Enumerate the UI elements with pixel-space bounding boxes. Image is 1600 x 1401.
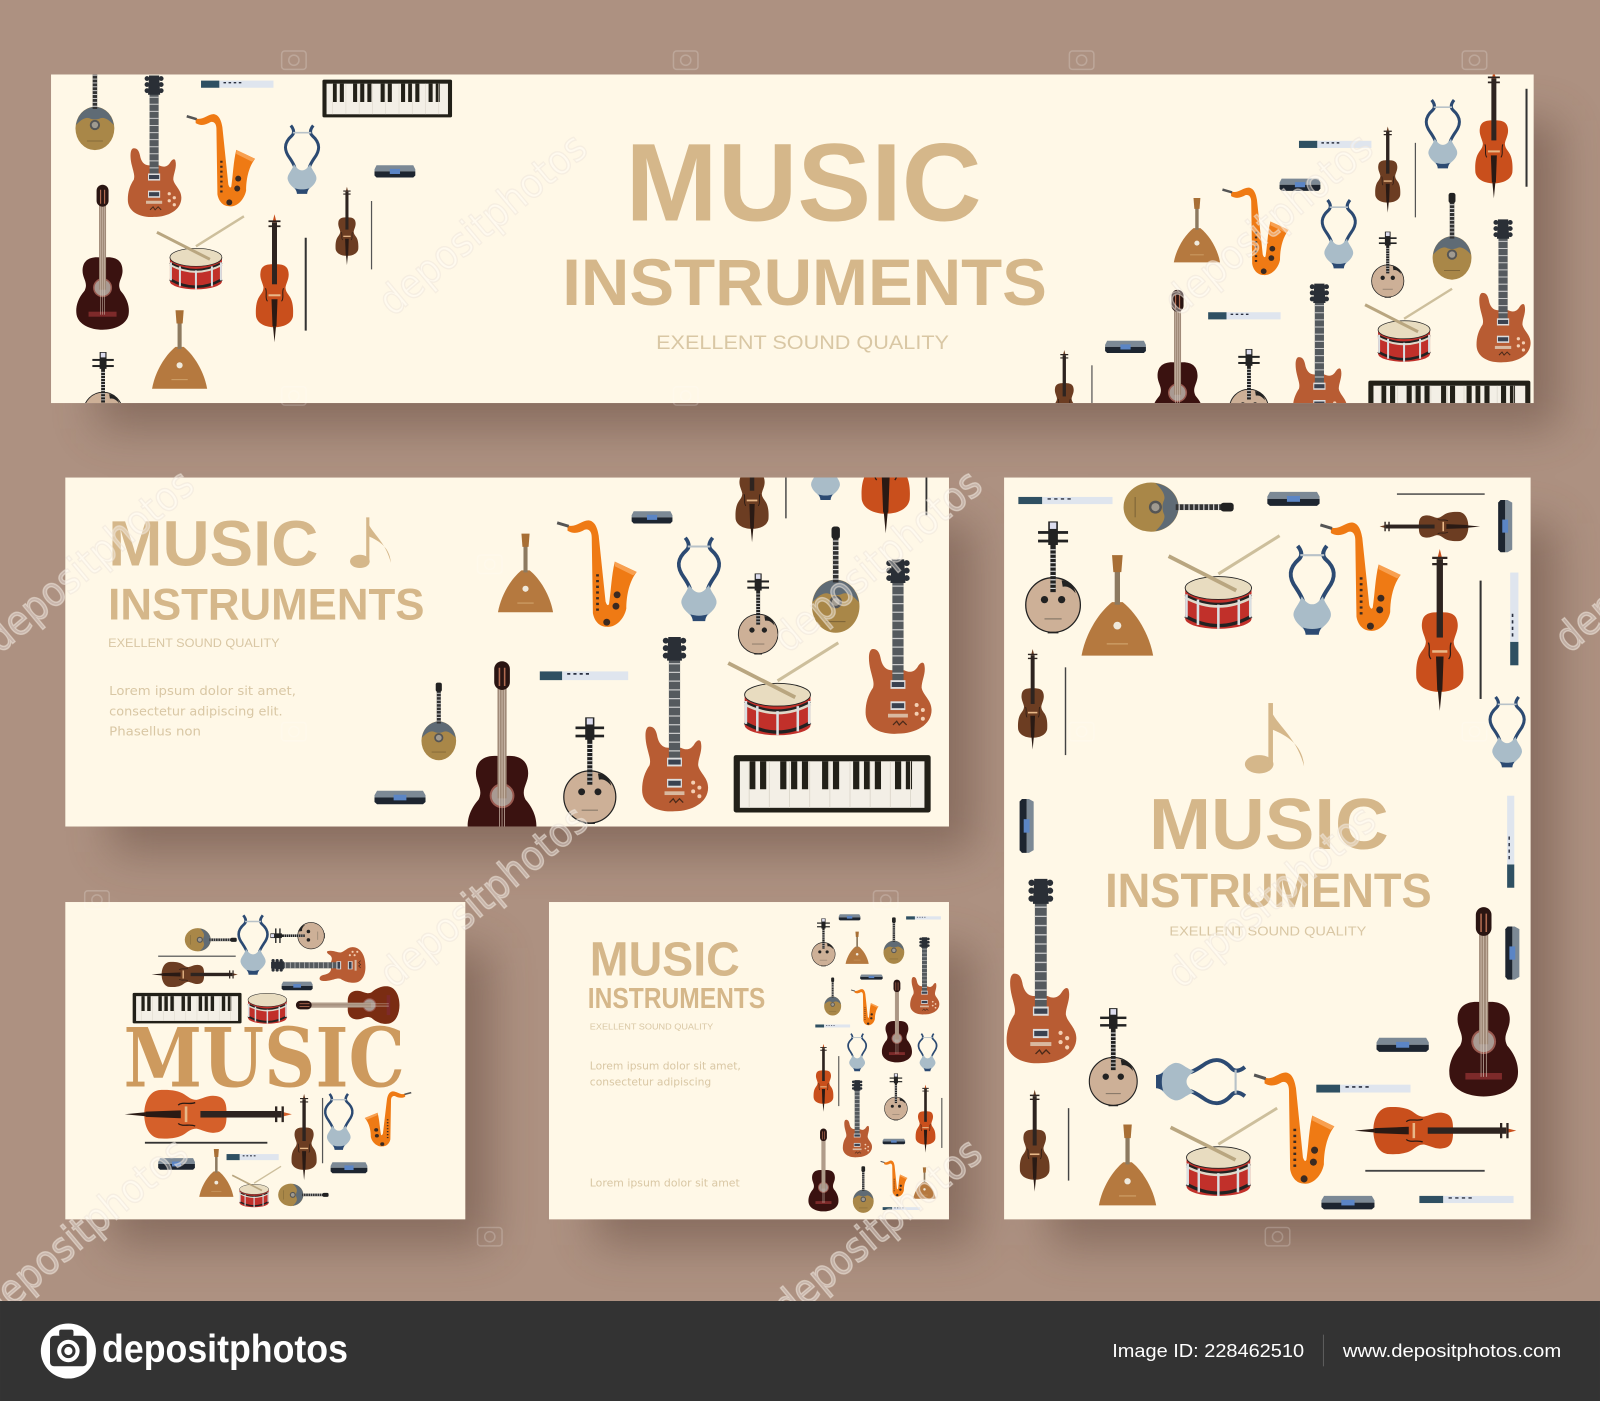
icon: violin [1054, 350, 1074, 403]
body text: Lorem ipsum dolor sit amet, [590, 1059, 741, 1072]
icon: saxophone [1222, 188, 1289, 275]
icon: violin [292, 1094, 317, 1180]
icon: electric guitar [271, 947, 365, 983]
icon: balalaika [152, 310, 207, 389]
icon: bow [926, 478, 927, 515]
icon: lyre [679, 538, 719, 621]
icon: balalaika [199, 1149, 233, 1197]
panel: tall poster [1004, 478, 1531, 1219]
icon: electric guitar [1007, 879, 1076, 1063]
icon: acoustic guitar [296, 986, 399, 1024]
icon: mandolin [185, 928, 237, 951]
icon: electric guitar [910, 937, 939, 1014]
icon: flute [1507, 796, 1514, 888]
icon: flute [1419, 1196, 1514, 1203]
icon: ruan [1230, 348, 1268, 403]
card instruments, clipped to the panel [374, 367, 932, 851]
icon: drum [232, 1166, 281, 1207]
icon: mandolin [824, 978, 841, 1016]
icon: mandolin [812, 527, 859, 633]
icon: mandolin [278, 1184, 329, 1206]
icon: harmonica [331, 1162, 367, 1173]
icon: bow [1365, 1170, 1485, 1172]
icon: ruan [1026, 521, 1080, 633]
icon: bow [838, 1056, 839, 1106]
icon: acoustic guitar [76, 185, 129, 330]
icon: bow [305, 238, 307, 331]
body text: consectetur adipiscing [590, 1076, 711, 1089]
icon: ruan [1089, 1008, 1137, 1106]
icon: keyboard [734, 755, 931, 812]
icon: balalaika [1099, 1124, 1156, 1205]
icon: ruan [564, 717, 616, 824]
icon: flute [1510, 573, 1518, 665]
icon: drum [248, 993, 287, 1024]
icon: bow [145, 1142, 267, 1144]
icon: mandolin [1124, 483, 1234, 532]
icon: bow [1525, 89, 1528, 187]
icon: music note [1245, 703, 1304, 773]
icon: cello [125, 1090, 292, 1139]
icon: flute [1018, 497, 1113, 504]
icon: flute [201, 81, 273, 88]
body text: Phasellus non [109, 725, 201, 740]
icon: lyre [1291, 546, 1334, 635]
icon: bow [1065, 667, 1066, 755]
icon: ruan [270, 922, 325, 949]
icon: bow [1068, 1108, 1069, 1181]
heading: INSTRUMENTS: INSTRUMENTS [588, 983, 765, 1015]
body text: Lorem ipsum dolor sit amet, [109, 684, 296, 699]
panel: landscape card [65, 478, 949, 826]
icon: cello [256, 214, 293, 342]
heading: MUSIC: MUSIC [626, 121, 982, 244]
icon: cello [1354, 1107, 1516, 1154]
icon: acoustic guitar [808, 1129, 839, 1211]
icon: ruan [738, 573, 778, 655]
icon: flute [1316, 1085, 1411, 1093]
icon: harmonica [1321, 1196, 1374, 1209]
heading: INSTRUMENTS: INSTRUMENTS [108, 578, 424, 629]
icon: drum [1365, 289, 1452, 362]
icon: mandolin [1433, 193, 1471, 280]
icon: ruan [884, 1073, 907, 1120]
icon: music note [350, 517, 391, 568]
icon: ruan [1372, 232, 1404, 298]
icon: violin [336, 187, 358, 265]
icon: mandolin [853, 1166, 874, 1213]
heading: MUSIC: MUSIC [108, 507, 318, 579]
icon: electric guitar [128, 75, 181, 217]
icon: flute [815, 1024, 850, 1027]
icon: harmonica [282, 982, 313, 990]
icon: mandolin [75, 74, 114, 150]
icon: cello [1475, 70, 1513, 198]
panel: small instrument column card [549, 902, 949, 1219]
icon: violin [1020, 1090, 1050, 1192]
icon: mandolin [883, 917, 904, 964]
icon: acoustic guitar [468, 661, 536, 851]
icon: violin [1375, 127, 1400, 213]
watermarks: depositphotos [1154, 123, 1382, 325]
watermarks: depositphotos [368, 123, 596, 325]
icon: lyre [239, 915, 268, 975]
icon: harmonica [1505, 927, 1519, 980]
icon: lyre [809, 432, 842, 500]
icon: drum [1169, 536, 1280, 629]
body text: consectetur adipiscing elit. [109, 704, 283, 719]
icon: bow [1397, 493, 1485, 495]
icon: keyboard [1368, 380, 1530, 403]
icon: cello [814, 1044, 833, 1112]
icon: harmonica [1498, 500, 1512, 552]
icon: cello [916, 1085, 935, 1153]
icon: lyre [1426, 100, 1459, 168]
icon: saxophone [1320, 522, 1401, 631]
icon: bow [322, 1098, 323, 1163]
icon: ruan [85, 352, 121, 403]
icon: harmonica [158, 1158, 195, 1170]
icon: electric guitar [843, 1080, 872, 1157]
icon: ruan [812, 918, 835, 966]
tagline: EXELLENT SOUND QUALITY [1169, 924, 1366, 939]
icon: saxophone [1254, 1073, 1334, 1184]
icon: saxophone [187, 114, 255, 206]
site url: www.depositphotos.com [1342, 1340, 1561, 1361]
icon: flute [1299, 141, 1371, 148]
body text [590, 1059, 741, 1089]
icon: balalaika [913, 1167, 936, 1199]
icon: saxophone [557, 520, 637, 627]
icon: violin [1380, 512, 1480, 541]
icon: electric guitar [866, 559, 932, 734]
heading: INSTRUMENTS: INSTRUMENTS [1105, 865, 1432, 918]
icon: lyre [1490, 697, 1524, 767]
logo: camera mark [41, 1323, 96, 1379]
icon: saxophone [365, 1091, 411, 1146]
panel: small music emblem card [65, 902, 465, 1219]
icon: lyre [285, 126, 319, 194]
icon: harmonica [1020, 799, 1034, 853]
icon: violin [735, 429, 769, 542]
icon: lyre [1156, 1060, 1245, 1103]
icon: electric guitar [1293, 284, 1346, 403]
icon: mandolin [421, 683, 456, 760]
icon: lyre [1322, 200, 1355, 268]
footer bar [0, 1301, 1600, 1401]
icon: lyre [325, 1094, 352, 1150]
icon: harmonica [1105, 341, 1146, 353]
logo: wordmark: depositphotos [102, 1328, 348, 1371]
watermarks: depositphotos [369, 795, 597, 997]
icon: drum [157, 216, 244, 289]
footnote text: Lorem ipsum dolor sit amet [590, 1177, 740, 1190]
icon: harmonica [1377, 1038, 1429, 1052]
watermarks: depositphotos [1157, 795, 1385, 997]
heading: MUSIC: MUSIC [1149, 784, 1389, 865]
body text [109, 684, 296, 740]
icon: lyre [848, 1034, 866, 1071]
tagline: EXELLENT SOUND QUALITY [656, 332, 949, 354]
icon: harmonica [860, 974, 883, 980]
icon: flute [883, 1207, 920, 1210]
icon: keyboard [133, 993, 242, 1023]
icon: acoustic guitar [882, 980, 912, 1062]
icon: violin [1018, 649, 1047, 750]
icon: bow [371, 201, 372, 269]
icon: harmonica [1267, 492, 1320, 506]
icon: balalaika [1174, 198, 1220, 262]
icon: electric guitar [642, 637, 708, 811]
icon: electric guitar [1477, 219, 1531, 362]
icon: lyre [918, 1034, 937, 1071]
icon: cello [1416, 549, 1463, 711]
heading: INSTRUMENTS: INSTRUMENTS [562, 246, 1047, 320]
watermarks: depositphotos [763, 1128, 991, 1330]
icon: cello [862, 367, 910, 533]
icon: harmonica [374, 791, 426, 804]
icon: keyboard [322, 80, 452, 117]
icon: balalaika [846, 932, 869, 964]
icon: harmonica [632, 511, 672, 523]
icon: flute [1208, 312, 1281, 319]
icon: bow [785, 478, 787, 518]
icon: bow [941, 1098, 942, 1148]
heading: MUSIC: MUSIC [590, 933, 740, 986]
tagline: EXELLENT SOUND QUALITY [108, 636, 280, 650]
icon: harmonica [374, 165, 415, 178]
icon: balalaika [1082, 555, 1153, 656]
icon: flute [906, 916, 941, 920]
icon: acoustic guitar [1154, 290, 1200, 403]
icon: harmonica [1280, 179, 1320, 191]
icon: harmonica [839, 914, 860, 920]
icon: flute [227, 1154, 279, 1160]
icon: violin [152, 962, 238, 987]
icon: flute [540, 671, 628, 680]
icon: bow [1415, 143, 1416, 217]
panel shadows [97, 120, 1559, 1245]
icon: bow [158, 956, 236, 957]
image id: Image ID: 228462510 [1112, 1340, 1304, 1361]
icon: saxophone [851, 989, 878, 1025]
icon: saxophone [881, 1161, 907, 1197]
icon: balalaika [498, 534, 553, 612]
watermarks: depositphotos [763, 460, 991, 662]
icon: drum [1171, 1108, 1277, 1196]
icon: drum [728, 643, 838, 735]
icon: harmonica [883, 1139, 905, 1144]
tagline: EXELLENT SOUND QUALITY [590, 1022, 714, 1032]
heading: MUSIC: MUSIC [123, 1011, 405, 1107]
panel: wide banner [51, 74, 1534, 404]
banner instruments, clipped to the panel [75, 63, 1531, 435]
icon: bow [1480, 581, 1482, 699]
icon: bow [1091, 365, 1093, 406]
icon: acoustic guitar [1449, 907, 1518, 1097]
